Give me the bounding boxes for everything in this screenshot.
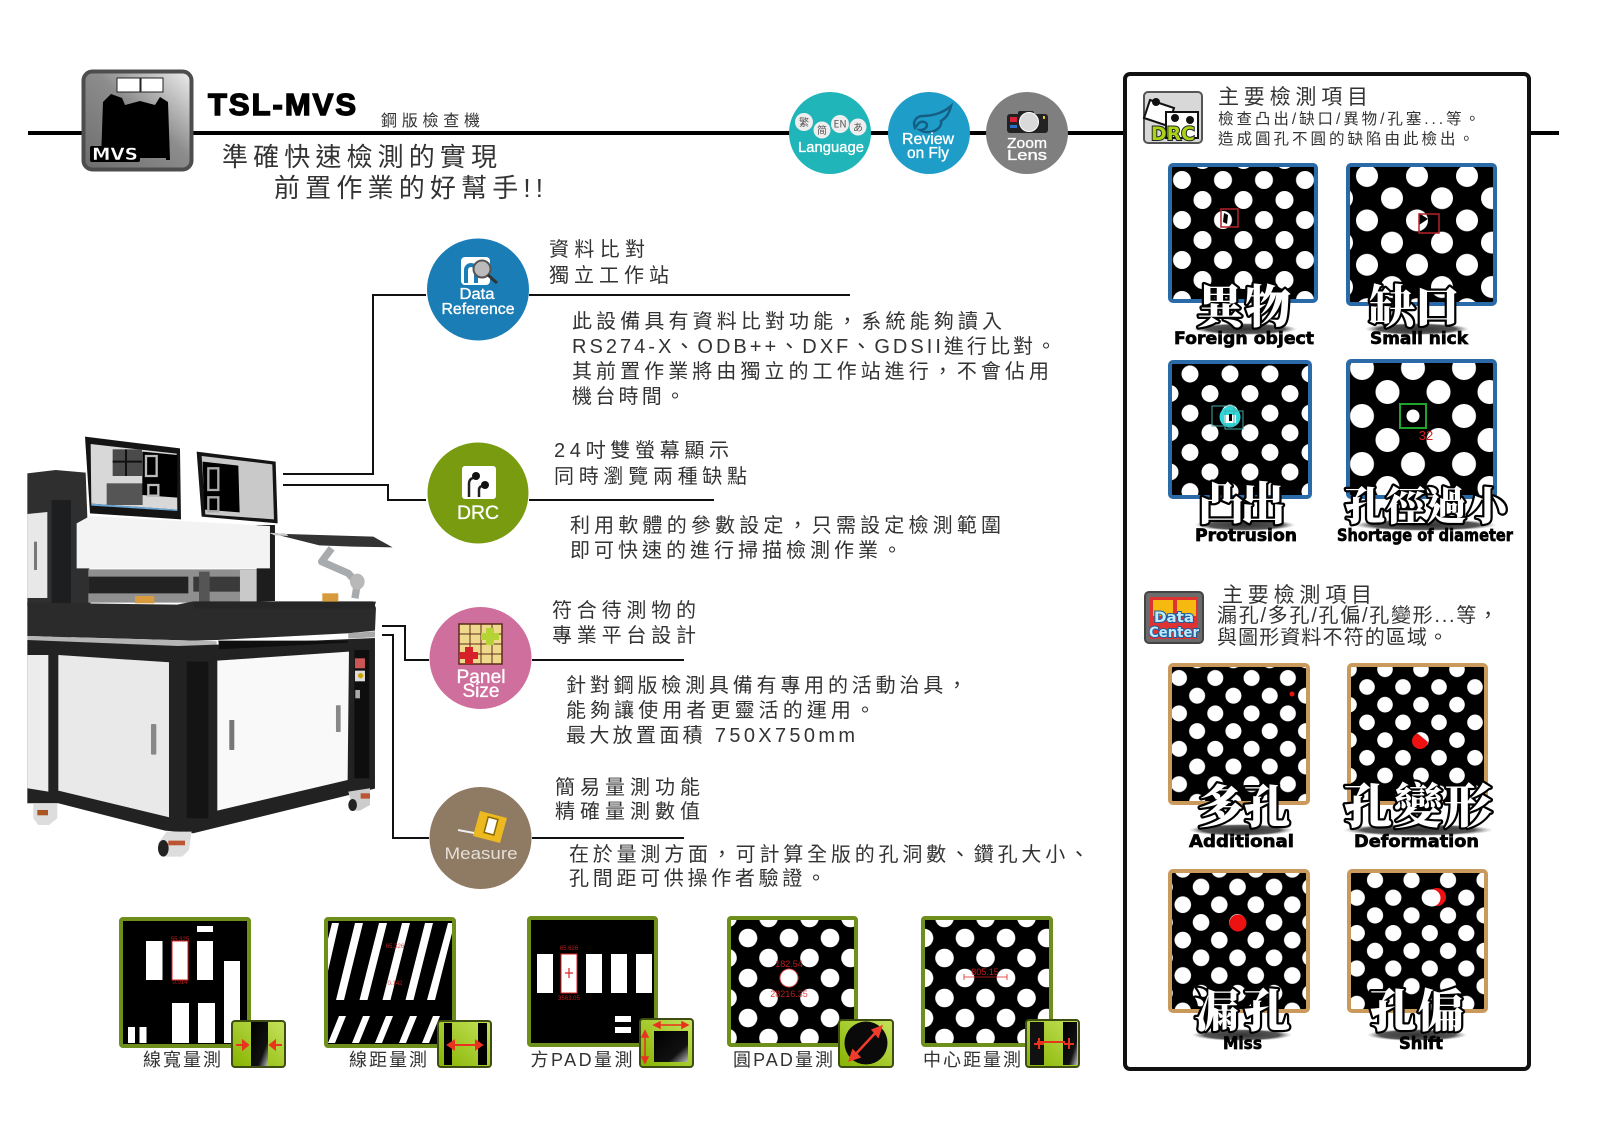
icon: data reference: Data [460,286,495,303]
text: measuring description: 在於量測方面，可計算全版的孔洞數、鑽孔大小、 [569,843,1089,866]
tagline: 準確快速檢測的實現 [222,142,497,172]
icon: data reference: Reference [442,301,515,318]
icon: data center category: Center [1149,625,1199,641]
label: miss: 漏孔 [1194,975,1290,1041]
heading: data center items: 漏孔/多孔/孔偏/孔變形...等， [1217,604,1498,627]
label: line width: 線寬量測 [143,1050,221,1070]
measure sample: line spacing [326,919,491,1067]
label: shortage of diameter: Shortage of diameter [1337,526,1514,546]
sample: shift [1349,871,1486,1011]
text: data comparison description: 此設備具有資料比對功能，系統能夠讀入 [572,310,1002,333]
label: deformation: 孔變形 [1344,768,1492,837]
heading: dual monitors: 同時瀏覽兩種缺點 [554,465,747,488]
measure sample: square pad: 65.626 [560,946,579,952]
measure sample: square pad: 3563.05 [558,996,580,1002]
badge: language: EN [833,116,847,130]
tagline: 前置作業的好幫手!! [274,173,543,203]
icon: round pad [839,1020,893,1067]
sample: deformation [1349,665,1486,803]
measure sample: square pad [529,918,693,1067]
title [208,87,480,130]
heading: data comparison [549,238,669,287]
text: data comparison description: RS274-X、ODB++、DXF、GDSII進行比對。 [572,335,1056,358]
icon: measure [430,787,532,889]
label: foreign object: Foreign object [1174,329,1314,349]
badge: language: 简 [817,122,827,137]
product logo icon [84,72,192,170]
icon: center distance [1026,1020,1079,1067]
label: additional: Additional [1189,832,1294,852]
sample: small nick [1348,165,1495,304]
icon: DRC: DRC [457,503,499,524]
heading: simple measuring: 精確量測數值 [555,800,700,823]
text: platform description: 能夠讓使用者更靈活的運用。 [566,699,875,722]
badge: language [789,92,871,174]
badge: zoom lens: Lens [1007,147,1047,164]
text: platform description: 最大放置面積 750X750mm [566,724,855,747]
heading: DRC items: 主要檢測項目 [1218,86,1368,109]
icon: data center category [1145,592,1203,643]
icon: line width [232,1021,285,1067]
text: measuring description: 孔間距可供操作者驗證。 [569,867,826,890]
label: additional: 多孔 [1198,771,1290,837]
sample: foreign object [1170,165,1316,301]
text: measuring description [569,843,1089,890]
connector: data reference [283,295,850,474]
heading: DRC items: 造成圓孔不圓的缺陷由此檢出。 [1218,130,1474,148]
label: shortage of diameter: 孔徑過小 [1345,475,1512,532]
icon: square pad [640,1019,693,1067]
heading: data center items: 主要檢測項目 [1222,584,1372,607]
badge: zoom lens: Zoom [1007,135,1047,152]
label: protrusion: Protrusion [1195,526,1297,546]
icon: panel size: Size [462,681,500,702]
heading: data center items: 與圖形資料不符的區域。 [1217,626,1448,649]
label: square pad: 方PAD量測 [530,1050,632,1070]
label: shift: Shift [1399,1034,1443,1054]
title: 鋼版檢查機 [381,112,480,130]
text: dual monitors description: 即可快速的進行掃描檢測作業。 [570,539,902,562]
sample: shortage of diameter: 32 [1419,428,1433,443]
label: protrusion: 凸出 [1198,468,1286,534]
icon: DRC [428,442,528,544]
heading: simple measuring [555,776,700,823]
label: center distance: 中心距量測 [923,1050,1021,1070]
label: round pad: 圓PAD量測 [733,1050,833,1070]
badge: zoom lens [986,92,1068,174]
heading: DRC items [1218,86,1480,148]
measure sample: line width [121,919,285,1067]
badge: language: あ [853,119,863,134]
sample: protrusion [1170,362,1310,497]
machine photo [27,437,393,857]
label: deformation: Deformation [1354,832,1479,852]
heading: data comparison: 資料比對 [549,238,645,261]
heading: dedicated platform [552,599,696,647]
heading: DRC items: 檢查凸出/缺口/異物/孔塞...等。 [1218,109,1480,128]
badge: review on fly: on Fly [907,145,949,162]
text: platform description [566,674,967,747]
label: miss: Miss [1223,1034,1262,1054]
connector: DRC [283,485,714,500]
connector: panel size [382,626,684,660]
text: platform description: 針對鋼版檢測具備有專用的活動治具， [566,674,967,697]
product logo icon: MVS [92,145,138,165]
text: dual monitors description [570,514,1001,562]
heading: simple measuring: 簡易量測功能 [555,776,700,799]
heading: data comparison: 獨立工作站 [549,264,669,287]
sample: miss [1170,871,1308,1011]
icon: DRC category [1144,92,1202,145]
text: data comparison description: 其前置作業將由獨立的工作站進行，不會佔用 [572,360,1049,383]
icon: measure: Measure [444,844,518,863]
sample: shortage of diameter [1348,361,1495,497]
icon: data center category: Data [1154,610,1194,626]
measure sample: line width: 0.014 [172,980,188,986]
text: dual monitors description: 利用軟體的參數設定，只需設定檢測範圍 [570,514,1001,537]
text: data comparison description [572,310,1056,408]
connector: measure [382,635,684,838]
measure sample: round pad [729,918,893,1067]
panel: inspection items [1125,74,1529,1069]
heading: dedicated platform: 專業平台設計 [552,624,696,647]
heading: dedicated platform: 符合待測物的 [552,599,696,622]
heading: dual monitors: 24吋雙螢幕顯示 [554,439,729,462]
badge: language: 繁 [799,114,809,129]
icon: panel size: Panel [456,667,506,688]
label: shift: 孔偏 [1370,975,1464,1041]
label: foreign object [1174,271,1314,349]
icon: DRC category: DRC [1151,123,1195,145]
heading: data center items [1217,584,1498,649]
heading: dual monitors [554,439,747,488]
icon: panel size [430,607,532,709]
text: data comparison description: 機台時間。 [572,385,685,408]
title: TSL-MVS [208,87,356,122]
measure sample: line spacing: 65.326 [386,944,405,950]
header rule [28,131,1559,135]
label: foreign object: 異物 [1197,271,1291,337]
badge: language: Language [798,139,864,156]
measure sample: round pad: 28216.35 [770,989,808,999]
sample: additional [1170,665,1308,803]
label: line spacing: 線距量測 [349,1050,427,1070]
badge: review on fly [888,92,970,174]
icon: line spacing [438,1021,491,1067]
measure sample: line width: 55.325 [171,937,190,943]
tagline [222,142,543,203]
measure sample: round pad: 182.54 [775,959,803,969]
icon: data reference [427,238,529,340]
label: small nick: 缺口 [1369,271,1460,337]
badge: review on fly: Review [902,131,954,148]
measure sample: center distance [923,918,1079,1067]
label: small nick: Small nick [1370,329,1469,349]
measure sample: center distance: 805.15 [971,967,999,977]
measure sample: line spacing: 0.142 [387,981,403,987]
